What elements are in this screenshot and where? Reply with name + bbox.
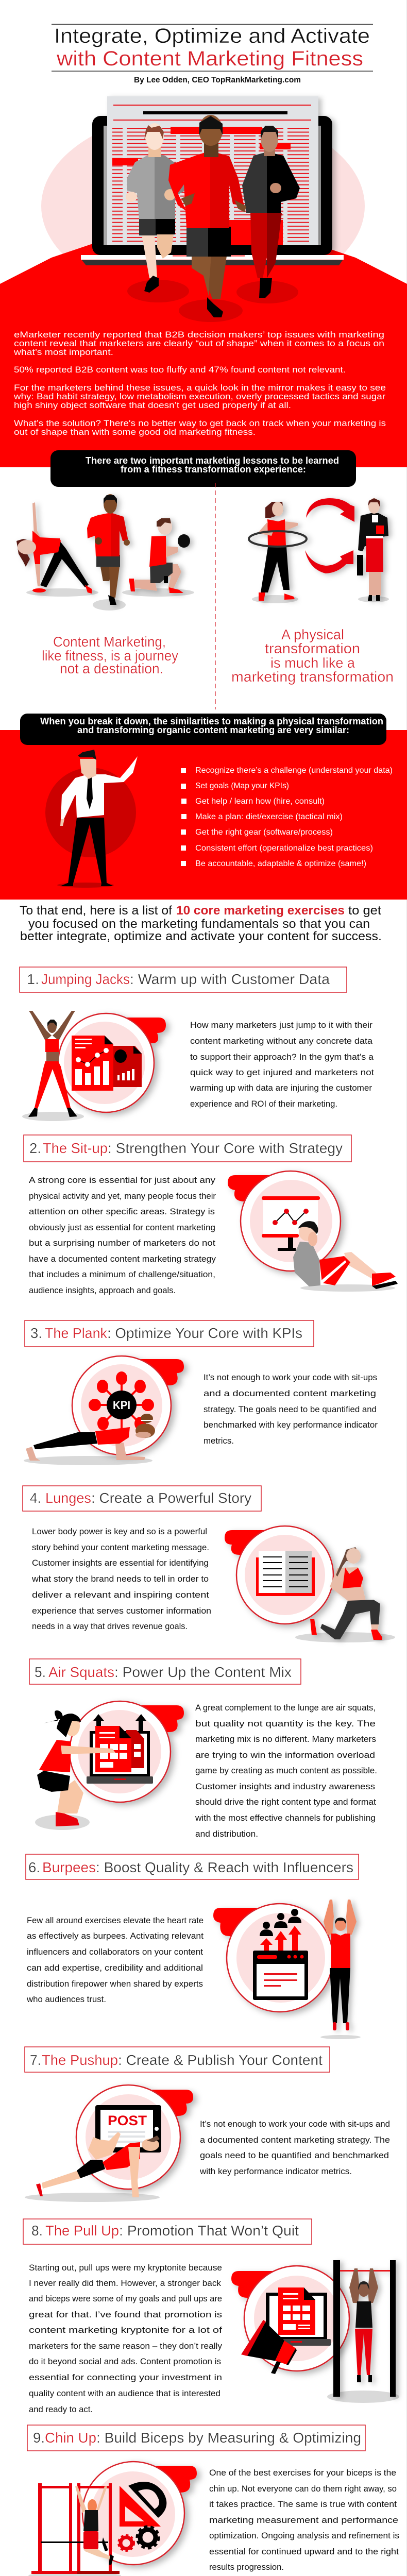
woman with hula hoop	[249, 502, 307, 601]
title block	[52, 24, 373, 72]
man doing sit-up	[293, 1221, 398, 1289]
heading: exercise 1	[20, 967, 347, 992]
heading: exercise 8: : Promotion That Won’t Quit	[119, 2223, 299, 2239]
text: exercise 8: marketers for the same reason – they don’t really	[29, 2342, 223, 2351]
lead-in statement	[20, 904, 382, 943]
text: exercise 7: goals need to be quantified and benchmarked	[200, 2151, 389, 2160]
intro copy on red panel: For the marketers behind these issues, a quick look in the mirror makes it easy to see	[14, 383, 386, 393]
heading: exercise 5: Air Squats	[48, 1664, 114, 1680]
caption: journey: like fitness, is a journey	[42, 648, 178, 664]
text: exercise 1: warming up with data are injuring the customer	[190, 1083, 372, 1093]
heading: exercise 6: 6.	[28, 1859, 40, 1875]
text: exercise 5: game by creating as much content as possible.	[195, 1766, 377, 1775]
text: exercise 6	[26, 1916, 204, 2004]
heading: exercise 7: : Create & Publish Your Content	[118, 2052, 323, 2068]
text: exercise 8: Starting out, pull ups were my kryptonite because	[29, 2263, 222, 2273]
callout: similarities: When you break it down, the similarities to making a physical transformation	[40, 716, 383, 726]
heading: exercise 9: Chin Up	[45, 2430, 96, 2446]
heading: exercise 1: 1.	[27, 971, 39, 987]
icon: KPI hub	[89, 1371, 154, 1432]
heading: exercise 8: 8.	[31, 2223, 43, 2239]
text: exercise 2	[29, 1176, 216, 1295]
heading: exercise 2: The Sit-up	[43, 1140, 108, 1156]
heading: exercise 5	[29, 1659, 301, 1684]
caption: transformation: transformation	[265, 640, 360, 656]
heading: exercise 8	[23, 2219, 312, 2244]
text: exercise 7: with key performance indicator metrics.	[199, 2167, 352, 2176]
woman in plank	[26, 1414, 155, 1461]
caption: journey: Content Marketing,	[53, 634, 166, 650]
runner: centre man in red	[168, 115, 246, 317]
illustration: fitness journey trio	[16, 494, 194, 611]
caption: journey	[42, 634, 178, 676]
text: exercise 5: A great complement to the lunge are air squats,	[195, 1703, 376, 1713]
checklist: Recognize there’s a challenge (understand your data)	[195, 766, 393, 775]
illustration: lunge with story book	[225, 1526, 395, 1642]
checklist: Get help / learn how (hire, consult)	[195, 797, 325, 806]
icon: presentation board	[262, 1196, 320, 1251]
intro copy on red panel: out of shape than with some good old marketing fitness.	[14, 428, 256, 437]
callout: two lessons: There are two important marketing lessons to be learned	[86, 455, 339, 466]
lead-in statement: 10 core marketing exercises	[176, 904, 345, 918]
heading: exercise 9: : Build Biceps by Measuring & Optimizing	[96, 2430, 361, 2446]
text: exercise 6: who audiences trust.	[26, 1995, 106, 2004]
heading: exercise 4: : Create a Powerful Story	[91, 1490, 251, 1506]
text: exercise 9: One of the best exercises for your biceps is the	[209, 2468, 396, 2478]
checklist: Be accountable, adaptable & optimize (same!)	[195, 859, 366, 868]
hero illustration: laptop and three runners	[0, 96, 407, 467]
text: exercise 5: with the most effective channels for publishing	[195, 1814, 376, 1823]
runner: left man in grey	[126, 123, 186, 293]
heading: exercise 2: 2.	[29, 1140, 41, 1156]
intro copy on red panel: what’s most important.	[13, 348, 113, 357]
illustration: pushup with tablet post	[25, 2085, 193, 2202]
badge	[76, 2085, 193, 2189]
intro copy on red panel: 50% reported B2B content was too fluffy and 47% found content not relevant.	[14, 365, 346, 375]
title block: Integrate, Optimize and Activate	[54, 25, 370, 47]
man in pushup tapping tablet	[36, 2132, 160, 2197]
woman with arms raised	[324, 1900, 357, 2030]
woman lunging	[310, 1547, 382, 1640]
text: exercise 4: what story the brand needs to tell in order to	[31, 1574, 209, 1584]
badge	[228, 1171, 341, 1271]
heading: exercise 2	[24, 1135, 351, 1162]
text: exercise 3	[204, 1373, 378, 1446]
badge	[231, 2266, 349, 2371]
lead-in statement: To that end, here is a list of	[20, 904, 172, 918]
text: exercise 7	[199, 2120, 390, 2176]
text: exercise 2: A strong core is essential for just about any	[29, 1176, 216, 1185]
heading: exercise 3: The Plank	[45, 1325, 108, 1341]
circular arrows	[305, 498, 354, 573]
illustration: plank with KPI hub	[24, 1356, 184, 1465]
woman stretching	[16, 502, 92, 594]
text: exercise 2: but a surprising number of marketers do not	[29, 1239, 215, 1248]
heading: exercise 7	[25, 2047, 330, 2072]
woman squatting	[37, 1710, 115, 1826]
text: exercise 4: Lower body power is key and so is a powerful	[32, 1527, 207, 1536]
heading: exercise 1: Jumping Jacks	[41, 971, 130, 987]
text: exercise 9: results progression.	[209, 2563, 284, 2572]
text: exercise 8	[29, 2263, 223, 2414]
text: exercise 2: attention on other specific areas. Strategy is	[29, 1207, 215, 1216]
heading: exercise 5: 5.	[35, 1664, 46, 1680]
text: exercise 4: needs in a way that drives revenue goals.	[32, 1622, 188, 1631]
heading: exercise 4: 4.	[30, 1490, 41, 1506]
text: exercise 9: optimization. Ongoing analysis and refinement is	[209, 2531, 399, 2540]
text: exercise 9	[209, 2468, 399, 2572]
text: exercise 3: benchmarked with key performance indicator	[204, 1420, 378, 1430]
text: exercise 2: that includes a minimum of challenge/situation,	[29, 1270, 215, 1279]
heading: exercise 9: 9.	[33, 2430, 45, 2446]
text: exercise 6: influencers and collaborators on your content	[27, 1947, 203, 1957]
text: exercise 4: Customer insights are essential for identifying	[32, 1558, 209, 1568]
text: exercise 1: quick way to get injured and marketers not	[190, 1068, 374, 1077]
text: exercise 4: story behind your content marketing message.	[32, 1543, 209, 1552]
text: exercise 5: but quality not quantity is the key. The	[195, 1719, 376, 1728]
heading: exercise 6: : Boost Quality & Reach with Influencers	[96, 1859, 353, 1875]
checklist: Consistent effort (operationalize best practices)	[195, 844, 373, 853]
text: exercise 8: content marketing kryptonite for a lot of	[29, 2326, 223, 2335]
red floor and intro panel	[0, 244, 407, 467]
byline: By Lee Odden, CEO TopRankMarketing.com	[134, 76, 301, 84]
badge	[213, 1904, 333, 2012]
icon: report documents	[72, 1036, 142, 1091]
panel: similarities	[0, 714, 407, 900]
icon: laptop with content documents	[87, 1714, 153, 1784]
checklist: Set goals (Map your KPIs)	[195, 782, 289, 790]
heading: exercise 3: : Optimize Your Core with KPIs	[107, 1325, 302, 1341]
callout: similarities: and transforming organic content marketing are very similar:	[77, 725, 349, 735]
text: exercise 5: should drive the right content type and format	[195, 1798, 376, 1807]
callout: similarities	[20, 714, 386, 745]
caption: journey: not a destination.	[60, 660, 163, 676]
text: exercise 4: deliver a relevant and inspiring content	[32, 1590, 209, 1600]
text: exercise 6: as effectively as burpees. Activating relevant	[27, 1931, 204, 1941]
text: exercise 9: it takes practice. The same is true with content	[209, 2500, 397, 2509]
intro copy on red panel	[13, 330, 386, 437]
text: exercise 2: obviously just as essential for content marketing	[29, 1223, 215, 1232]
checklist	[181, 766, 393, 868]
icon: laptop and document	[266, 2287, 331, 2346]
heading: exercise 7: The Pushup	[42, 2052, 118, 2068]
heading: exercise 7: 7.	[30, 2052, 41, 2068]
text: exercise 9: essential for continued upward and to the right	[209, 2547, 399, 2556]
floor shadows	[127, 280, 189, 302]
vertical divider	[215, 483, 216, 709]
text: exercise 4	[31, 1527, 211, 1631]
heading: exercise 3: 3.	[30, 1325, 42, 1341]
text: exercise 1: to support their approach? In the gym that’s a	[190, 1053, 374, 1062]
checklist: Get the right gear (software/process)	[195, 828, 333, 837]
intro copy on red panel: eMarketer recently reported that B2B decision makers’ top issues with marketing	[14, 330, 384, 340]
text: exercise 3: strategy. The goals need to be quantified and	[204, 1405, 377, 1414]
text: exercise 8: essential for connecting your investment in	[29, 2373, 222, 2382]
text: exercise 5: are trying to win the information overload	[195, 1751, 375, 1760]
heading: exercise 5: : Power Up the Content Mix	[114, 1664, 292, 1680]
badge	[225, 1526, 333, 1624]
text: exercise 2: physical activity and yet, many people focus their	[29, 1192, 216, 1201]
heading: exercise 4	[23, 1486, 261, 1511]
text: exercise 5: and distribution.	[195, 1829, 258, 1839]
heading: exercise 6	[26, 1854, 359, 1879]
lead-in statement: better integrate, optimize and activate your content for success.	[20, 929, 382, 943]
pink backdrop ellipse	[41, 110, 365, 302]
caption: transformation: is much like a	[270, 655, 355, 671]
callout: two lessons	[50, 450, 356, 487]
illustration: physical transformation	[249, 498, 389, 603]
text: exercise 2: audience insights, approach and goals.	[29, 1286, 176, 1295]
illustration: jumping jacks with data docs	[22, 1011, 166, 1121]
icon: tablet with POST: POST	[108, 2113, 147, 2128]
heading: exercise 9	[27, 2425, 365, 2451]
text: exercise 4: experience that serves customer information	[32, 1606, 211, 1616]
intro copy on red panel: high shiny object software that doesn’t get used properly if at all.	[14, 401, 291, 410]
caption: transformation	[231, 626, 394, 685]
text: exercise 5	[195, 1703, 377, 1839]
icon: tablet with POST	[95, 2105, 161, 2153]
businesswoman	[357, 498, 388, 601]
title block: with Content Marketing Fitness	[56, 47, 363, 70]
text: exercise 8: do it beyond social and ads. Content promotion is	[29, 2357, 221, 2366]
heading: exercise 3	[25, 1320, 314, 1347]
text: exercise 6: distribution firepower when shared by experts	[27, 1979, 203, 1989]
red chin-up frame	[31, 2483, 120, 2574]
text: exercise 7: a documented content marketing strategy. The	[200, 2136, 390, 2145]
text: exercise 1	[190, 1021, 374, 1109]
icon: businessman pointing up	[45, 750, 138, 888]
badge	[70, 1701, 184, 1802]
icon: open book	[256, 1551, 315, 1596]
icon: KPI hub: KPI	[113, 1399, 130, 1412]
illustration: burpees with influencers	[213, 1900, 361, 2039]
heading: exercise 2: : Strengthen Your Core with Strategy	[108, 1140, 343, 1156]
text: exercise 8: I never really did them. However, a stronger back	[29, 2279, 222, 2288]
lead-in statement: you focused on the marketing fundamentals so that you can	[28, 917, 370, 931]
text: exercise 5: Customer insights and industry awareness	[195, 1782, 375, 1791]
illustration: pull up with megaphone	[231, 2260, 399, 2403]
checklist: Make a plan: diet/exercise (tactical mix)	[195, 812, 343, 821]
intro copy on red panel: What’s the solution? There's no better way to get back on track when your marketing is	[14, 419, 386, 428]
badge	[58, 1013, 166, 1112]
text: exercise 3: metrics.	[204, 1436, 234, 1446]
heading: exercise 1: : Warm up with Customer Data	[130, 971, 330, 987]
callout: two lessons: from a fitness transformation experience:	[121, 464, 306, 474]
icon: browser with audience arrows	[253, 1909, 308, 2000]
text: exercise 6: can add expertise, credibility and additional	[27, 1963, 203, 1973]
man running	[87, 494, 130, 605]
text: exercise 6: Few all around exercises elevate the heart rate	[27, 1916, 204, 1925]
illustration: chin up with measuring tools	[28, 2462, 197, 2576]
illustration: air squats with content mix	[35, 1701, 184, 1830]
text: exercise 3: It’s not enough to work your code with sit-ups	[204, 1373, 377, 1382]
heading: exercise 8: The Pull Up	[45, 2223, 119, 2239]
laptop screen	[81, 96, 344, 265]
intro copy on red panel: content reveal that marketers are clearly “out of shape” when it comes to a focus on	[14, 339, 384, 348]
caption: transformation: A physical	[281, 626, 344, 642]
text: exercise 8: and ready to act.	[29, 2405, 93, 2414]
text: exercise 2: have a documented content marketing strategy	[29, 1255, 216, 1264]
text: exercise 9: marketing measurement and performance	[209, 2516, 398, 2525]
text: exercise 8: and biceps were some of my goals and pull ups are	[29, 2294, 222, 2303]
caption: transformation: marketing transformation	[231, 669, 394, 685]
lead-in statement: to get	[348, 904, 381, 918]
runner: right man in black	[242, 126, 300, 298]
woman doing jumping jack	[28, 1011, 77, 1117]
woman doing chin-up	[75, 2486, 114, 2565]
heading: exercise 4: Lunges	[45, 1490, 91, 1506]
text: exercise 5: marketing mix is no different. Many marketers	[195, 1735, 376, 1744]
text: exercise 8: great for that. I’ve found that promotion is	[29, 2310, 222, 2319]
text: exercise 1: content marketing without any concrete data	[190, 1037, 373, 1046]
text: exercise 1: experience and ROI of their marketing.	[190, 1099, 337, 1109]
text: exercise 1: How many marketers just jump to it with their	[190, 1021, 373, 1030]
icon: set square, protractor and gears	[118, 2482, 166, 2551]
text: exercise 3: and a documented content marketing	[204, 1389, 376, 1398]
badge	[72, 1356, 184, 1455]
man lunging with dumbbell	[129, 518, 190, 593]
badge	[82, 2462, 197, 2565]
text: exercise 8: quality content with an audience that is interested	[29, 2389, 221, 2398]
heading: exercise 6: Burpees	[42, 1859, 96, 1875]
intro copy on red panel: why: Bad habit strategy, low metabolism execution, overly processed tactics and sugar	[13, 392, 386, 401]
icon: megaphone	[241, 2320, 297, 2374]
illustration: sit-up with strategy board	[228, 1171, 398, 1292]
pull-up frame and woman	[333, 2260, 396, 2397]
text: exercise 7: It’s not enough to work your code with sit-ups and	[200, 2120, 390, 2129]
text: exercise 9: chin up. Not everyone can do them right away, so	[209, 2484, 397, 2494]
